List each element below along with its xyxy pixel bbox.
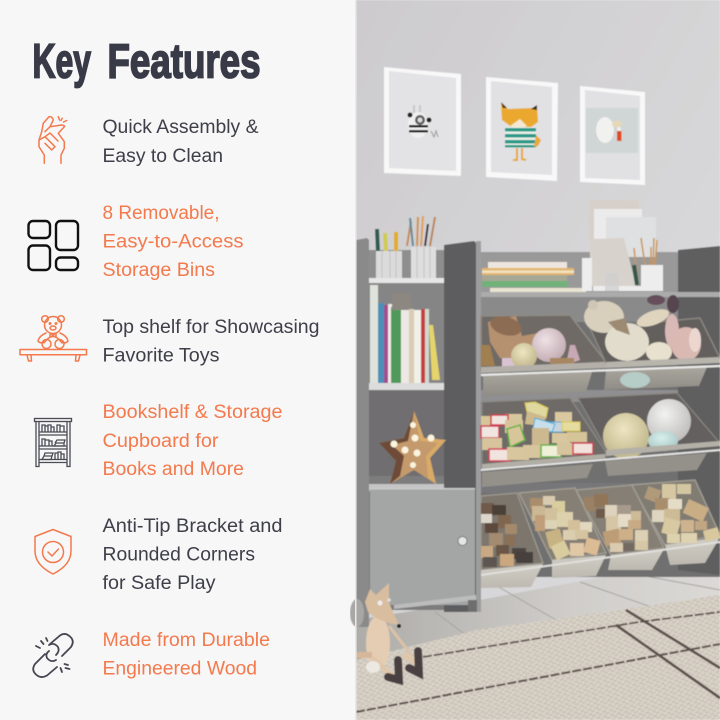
- upper bin left: [481, 313, 606, 373]
- text: top shelf: [102, 317, 320, 366]
- text: safety: Rounded Corners: [102, 544, 255, 566]
- text: removable bins: Storage Bins: [102, 260, 215, 281]
- feature: quick assembly: [39, 117, 259, 167]
- feature: top shelf: [20, 316, 320, 366]
- middle bin right: [578, 393, 720, 459]
- plush edge: [350, 599, 364, 627]
- text: safety: [102, 516, 282, 594]
- feature: durable wood: [33, 630, 270, 680]
- text: quick assembly: [102, 117, 259, 167]
- centre post: [444, 241, 481, 612]
- upper bin right: [584, 295, 720, 368]
- text: safety: for Safe Play: [102, 573, 216, 594]
- lower bin 5: [481, 493, 543, 588]
- panel: room photo: [350, 0, 720, 720]
- text: removable bins: 8 Removable,: [102, 203, 220, 224]
- lower rail: [481, 542, 720, 575]
- text: removable bins: [102, 203, 244, 281]
- left shelves: [369, 278, 477, 491]
- text: bookshelf: [102, 402, 282, 480]
- star lamp: [379, 411, 446, 484]
- upper bin fronts and rail: [481, 366, 720, 396]
- text: quick assembly: Quick Assembly &: [102, 117, 259, 138]
- text: quick assembly: Easy to Clean: [102, 146, 223, 167]
- cupboard: [370, 488, 477, 612]
- left side panel: [356, 238, 369, 627]
- title: [32, 36, 260, 88]
- wooden toy: [481, 313, 538, 366]
- middle bin left: [481, 398, 606, 470]
- text: top shelf: Favorite Toys: [102, 346, 220, 366]
- sidebar background: [0, 0, 356, 720]
- right post: [678, 246, 720, 575]
- framed picture: bear: [384, 67, 461, 176]
- pen cups: [376, 216, 436, 278]
- fox toy: [356, 583, 419, 680]
- sidebar edge: [355, 0, 356, 720]
- icon: shield with check: [35, 530, 71, 574]
- text: durable wood: Engineered Wood: [102, 658, 257, 680]
- icon: finger snap hand: [39, 117, 67, 163]
- icon: chain link: [33, 634, 73, 677]
- icon: teddy on shelf: [20, 316, 86, 361]
- text: bookshelf: Books and More: [102, 459, 244, 480]
- lower bins: [481, 480, 720, 588]
- title: Key: [32, 36, 91, 88]
- plush toys: [584, 295, 701, 362]
- top shelf items: [482, 200, 663, 292]
- feature: bookshelf: [34, 402, 282, 480]
- feature: safety: [35, 516, 282, 594]
- text: bookshelf: Bookshelf & Storage: [102, 402, 282, 423]
- lower bin 8: [631, 480, 720, 565]
- text: durable wood: Made from Durable: [102, 630, 270, 651]
- text: top shelf: Top shelf for Showcasing: [102, 317, 320, 338]
- framed picture: tooth character: [580, 86, 645, 185]
- icon: bookshelf: [34, 418, 72, 466]
- text: safety: Anti-Tip Bracket and: [102, 516, 282, 537]
- text: bookshelf: Cupboard for: [102, 431, 219, 452]
- floor tile joints: [435, 575, 720, 638]
- icon: storage bins grid: [28, 221, 78, 270]
- feature: removable bins: [28, 203, 244, 281]
- shelf back panels: [369, 250, 720, 610]
- alphabet blocks: [481, 402, 593, 461]
- lower bin 7: [576, 485, 664, 570]
- middle bin fronts and rail: [481, 450, 720, 487]
- floor: [356, 555, 720, 720]
- framed picture: fox: [486, 77, 558, 181]
- text: removable bins: Easy-to-Access: [102, 232, 244, 252]
- top shelf right: [481, 292, 720, 297]
- wall: [356, 0, 720, 640]
- text: durable wood: [102, 630, 270, 680]
- lower bin 6: [519, 488, 606, 578]
- left books: [370, 285, 440, 385]
- title: Features: [108, 36, 260, 88]
- rug: [356, 595, 720, 720]
- panel: key features sidebar: [0, 0, 356, 720]
